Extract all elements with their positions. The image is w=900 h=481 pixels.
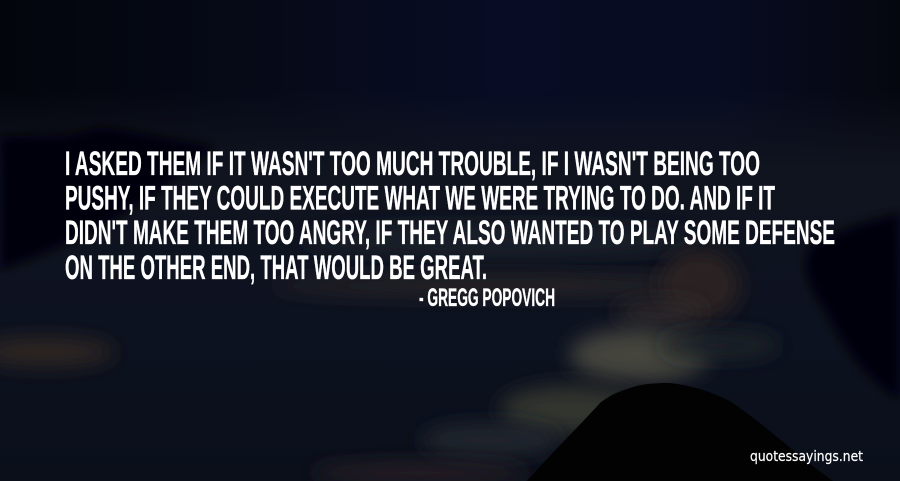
distant hill right <box>805 213 900 400</box>
distant hill left <box>0 127 215 270</box>
quote text <box>65 145 835 287</box>
quote text: ON THE OTHER END, THAT WOULD BE GREAT. <box>65 249 487 287</box>
attribution: - GREGG POPOVICH <box>419 284 555 312</box>
mountain silhouette <box>527 383 833 481</box>
watermark: quotessayings.net <box>750 449 863 465</box>
